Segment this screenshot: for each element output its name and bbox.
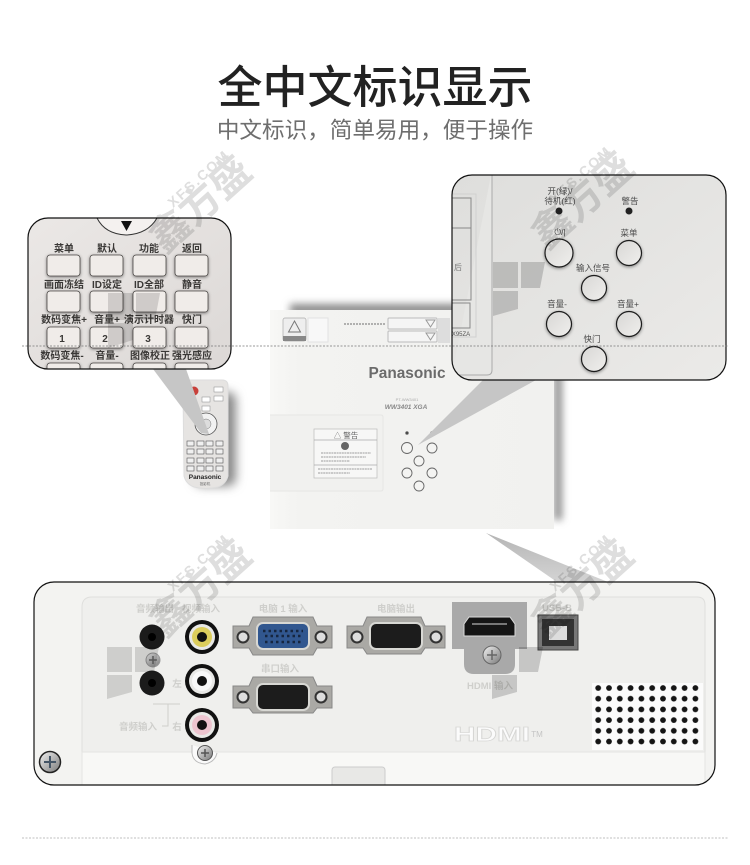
pointer: ports [486, 533, 608, 582]
screws [40, 745, 217, 772]
projector edge inset: X95ZA [452, 332, 470, 338]
remote key labels: 2 [102, 334, 108, 345]
control labels: 音量+ [617, 299, 639, 309]
indicator labels: 待机(红) [544, 196, 576, 206]
monitor output [347, 617, 445, 654]
watermark: top left: XFS.COM [164, 146, 233, 210]
port labels: 电脑 1 输入 [259, 603, 308, 615]
control labels: 音量- [547, 299, 567, 309]
projector edge inset [452, 170, 492, 375]
watermark: lower left: 鑫方盛 [141, 532, 260, 645]
remote key labels: 3 [145, 334, 151, 345]
watermark: top right: XFS.COM [546, 142, 615, 206]
remote control: Panasonic [189, 474, 222, 481]
watermark logo: upper right [493, 262, 545, 316]
remote key labels: 演示计时器 [124, 313, 174, 326]
remote key labels: 静音 [182, 278, 202, 291]
watermark logo: lower left [107, 647, 159, 699]
title: 全中文标识显示 [217, 62, 533, 113]
dashed line lower [22, 837, 728, 839]
remote key grid [47, 255, 208, 384]
control labels: 菜单 [620, 228, 638, 238]
model series: WW3401 XGA [385, 404, 428, 411]
dashed line upper [22, 345, 728, 347]
remote key labels: 快门 [182, 313, 202, 326]
remote key labels: 默认 [97, 242, 117, 255]
control labels: 输入信号 [576, 263, 610, 273]
remote key labels: ID设定 [92, 278, 122, 291]
USB-B port [538, 615, 578, 650]
port labels: 视频输入 [182, 603, 220, 615]
lamp cover panel [270, 415, 383, 491]
port labels: 电脑输出 [377, 603, 415, 615]
remote control [183, 380, 236, 488]
indicator labels: 警告 [621, 196, 639, 206]
RCA audio left [185, 664, 219, 698]
remote key labels: 强光感应 [172, 349, 212, 362]
warning label [314, 429, 377, 478]
port labels: HDMI 输入 [467, 680, 513, 692]
remote down key [97, 218, 157, 235]
remote key labels: 返回 [182, 243, 202, 255]
port labels: 音频输出 [136, 603, 174, 615]
watermark: top right: 鑫方盛 [523, 144, 642, 257]
bottom slot [332, 766, 386, 784]
port labels: 左 [172, 678, 182, 690]
watermark: lower right: 鑫方盛 [523, 532, 642, 645]
panel: remote control zoom [28, 218, 231, 384]
RCA audio right [185, 708, 219, 742]
pointer: projector buttons to zoom panel [418, 380, 536, 445]
control buttons [402, 432, 437, 491]
HDMI trademark: TM [531, 730, 543, 739]
remote key labels: 音量+ [94, 313, 120, 326]
watermark: lower left: XFS.COM [164, 530, 233, 594]
audio jacks [140, 624, 164, 696]
watermark: lower right: XFS.COM [546, 530, 615, 594]
watermark logo: upper left [108, 293, 160, 348]
remote key labels: 1 [59, 334, 65, 345]
speaker grille [592, 683, 703, 750]
serial input [233, 677, 332, 713]
subtitle: 中文标识，简单易用，便于操作 [217, 118, 533, 143]
watermark logo: lower right [492, 647, 543, 699]
port labels: 右 [172, 721, 182, 733]
port labels: 串口输入 [261, 663, 299, 675]
pointer: remote to zoom panel [153, 369, 209, 434]
watermark: top left: 鑫方盛 [141, 148, 260, 261]
control circles [545, 239, 642, 372]
panel: rear ports zoom [34, 582, 715, 789]
indicator labels: 开(绿)/ [547, 186, 573, 196]
control labels: 快门 [583, 334, 601, 344]
remote control: 投影机 [200, 481, 211, 486]
remote key labels: ID全部 [134, 278, 164, 291]
HDMI port [452, 602, 527, 674]
port labels [119, 603, 572, 733]
remote key labels: 图像校正 [130, 349, 170, 362]
remote key labels: 画面冻结 [44, 278, 84, 291]
remote key labels: 数码变焦- [40, 349, 84, 362]
remote key labels: 音量- [95, 349, 119, 362]
port recess [82, 596, 706, 752]
Panasonic logo: Panasonic [368, 365, 446, 382]
port labels: USB-B [542, 603, 572, 614]
top sticker strip [283, 318, 450, 343]
port labels: 音频输入 [119, 721, 157, 733]
model name: PT-WW3401 [396, 397, 419, 402]
HDMI logo: HDMI [454, 724, 530, 746]
RCA video input [185, 620, 219, 654]
projector top view [270, 304, 562, 529]
remote key labels: 菜单 [54, 242, 74, 255]
control labels [547, 227, 639, 344]
remote key labels [40, 242, 212, 362]
projector edge inset: 后 [454, 262, 462, 272]
remote key labels: 数码变焦+ [41, 313, 87, 326]
remote key labels: 功能 [139, 242, 159, 255]
panel: control panel zoom [452, 170, 726, 380]
indicator labels [544, 186, 639, 214]
VGA computer input [233, 617, 332, 655]
warning label: △ 警告 [334, 430, 359, 440]
control labels: ⏻/| [554, 227, 566, 237]
